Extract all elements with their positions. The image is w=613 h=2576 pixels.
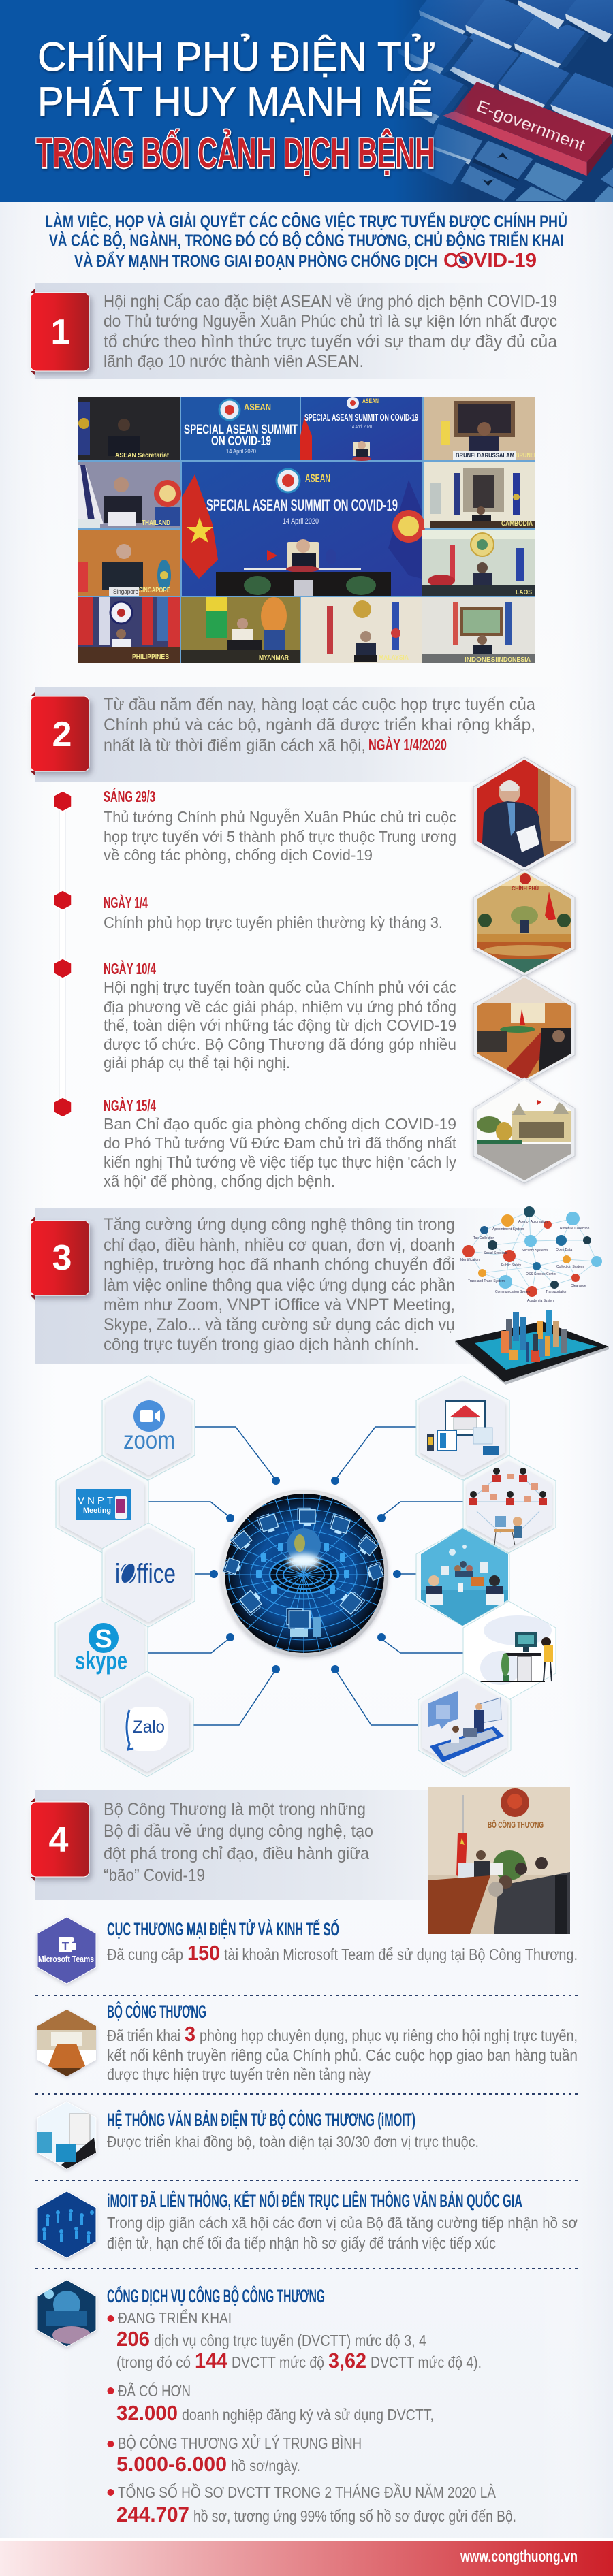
icon: meeting room hexagon [37,2010,96,2076]
photo: national online conference [473,975,576,1082]
item: iMOIT electronic document system: Được triển khai đồng bộ, toàn diện tại 30/30 đơn vị trực thuộc. [107,2133,479,2151]
tile: main summit view: SPECIAL ASEAN SUMMIT ON COVID-19 [206,496,398,515]
section 4 text: đột phá trong chỉ đạo, điều hành giữa [104,1844,369,1863]
hexagon tile: remote classroom on phone [418,1673,511,1777]
stat: daily records: BỘ CÔNG THƯƠNG XỬ LÝ TRUNG BÌNH [118,2433,362,2452]
icon: Microsoft Teams hexagon: Microsoft Teams [38,1954,94,1964]
section 3 text: làm việc online thông qua việc ứng dụng các phần [104,1276,455,1295]
section 1 text: tổ chức theo hình thức trực tuyến với sự tham dự đầy đủ của [104,332,557,351]
number badge 3: 3 [52,1238,72,1278]
hexagon tile: working from home [463,1601,556,1700]
section 4 text: Bộ đi đầu về ứng dụng công nghệ, tạo [104,1822,373,1841]
tile: ASEAN Secretariat [78,397,180,460]
tile: summit slide: ASEAN [244,402,271,413]
stat: services deployed: 144 [195,2349,228,2372]
title: CHÍNH PHỦ ĐIỆN TỬ [37,34,436,80]
section 1 text [104,292,557,371]
item: Ministry of Industry and Trade: được thực hiện trực tuyến trên nền tảng này [107,2065,371,2083]
stat: daily records: hồ sơ/ngày. [231,2457,300,2475]
illustration: e-government network diagram: Transportation [546,1290,567,1294]
illustration: e-government network diagram: Open Data [556,1248,572,1252]
illustration: e-government network diagram: Communication System [495,1290,531,1294]
subtitle: COVID-19 [443,250,537,272]
section 2 text: Chính phủ và các bộ, ngành đã được triển khai rộng khắp, [104,715,535,735]
tile: summit slide [181,397,300,460]
stat: daily records: 5.000-6.000 [116,2452,227,2476]
illustration: e-government network diagram: Identification [460,1258,480,1262]
hub: global network globe [208,1490,399,1657]
event: 10/4: được tổ chức. Bộ Công Thương đã đóng góp nhiều [104,1035,456,1053]
icon: digital tech hexagon [37,2280,96,2347]
photo: Ministry of Industry and Trade meeting: BỘ CÔNG THƯƠNG [488,1820,544,1830]
tile: Philippines: PHILIPPINES [132,654,169,661]
item: public service portal [37,2280,516,2526]
illustration: e-government network diagram: Academia System [527,1299,554,1303]
stat: registered businesses: ĐÃ CÓ HƠN [118,2382,191,2400]
illustration: e-government network diagram: Revenue Collection [560,1227,590,1231]
hexagon tile: Skype [55,1597,148,1703]
logo: iOffice: iOffice [115,1559,176,1589]
illustration: e-government network diagram: Social Services [484,1251,507,1255]
item: E-commerce department: 150 [187,1941,220,1965]
small monitors around hub [223,1508,385,1637]
event: 10/4: địa phương về các giải pháp, nhiệm vụ ứng phó tổng [104,998,456,1016]
logo: Zoom: zoom [123,1426,175,1454]
connector dots [210,1477,401,1673]
tile: main summit view: ASEAN [305,472,330,485]
number badge 4 [31,1797,89,1882]
section 2 text: Từ đầu năm đến nay, hàng loạt các cuộc họp trực tuyến của [104,695,535,714]
item: Ministry of Industry and Trade: BỘ CÔNG THƯƠNG [107,2001,206,2022]
photo: prime minister speaking [473,757,576,871]
event: 29/3: SÁNG 29/3 [104,787,155,805]
event: 29/3 [104,787,456,864]
illustration: e-government network diagram: Track and Trace System [468,1279,505,1283]
event: 1/4: NGÀY 1/4 [104,893,148,912]
logo: VNPT Meeting: Meeting [83,1507,111,1515]
hexagon tile: VNPT Meeting [56,1455,148,1553]
tile: summit slide: 14 April 2020 [226,448,256,455]
timeline marker 2 [54,890,72,910]
tile: Singapore: SINGAPORE [139,587,170,594]
logo: Zalo: Zalo [133,1718,165,1737]
title [36,34,436,177]
stat: services deployed: DVCTT mức độ [232,2353,324,2371]
event: 15/4: kiến nghị Thủ tướng về việc tiếp tục thực hiện 'cách ly [104,1153,456,1171]
illustration: e-government network diagram: Tax Collection [473,1236,494,1240]
illustration: e-government network diagram: Appointment System [492,1227,524,1231]
section 1 text: do Thủ tướng Nguyễn Xuân Phúc chủ trì là sự kiện lớn nhất được [104,311,557,331]
keyboard image with E-government key [381,0,613,202]
event: 10/4: NGÀY 10/4 [104,959,156,978]
panel: section 1 [31,283,573,379]
item: iMOIT electronic document system [37,2102,479,2169]
illustration: e-government network diagram: Collection System [556,1265,584,1269]
number badge 1: 1 [51,312,70,352]
number badge 4: 4 [49,1820,69,1860]
event: 15/4: xã hội' để phòng, chống dịch bệnh. [104,1172,335,1190]
section 2 text: NGÀY 1/4/2020 [368,735,447,754]
number badge 3 [31,1216,89,1300]
hexagon tile: iOffice [102,1523,195,1627]
event: 29/3: Thủ tướng Chính phủ Nguyễn Xuân Phúc chủ trì cuộc [104,808,456,826]
event: 15/4: NGÀY 15/4 [104,1096,156,1114]
timeline marker 1 [54,791,72,811]
item: iMOIT national interconnection [37,2189,578,2258]
tile: summit host: ASEAN [362,398,379,404]
event: 1/4 [104,893,443,931]
tile: Indonesia: INDONESIA [497,656,531,664]
event: 15/4: do Phó Thủ tướng Vũ Đức Đam chủ trì đã thống nhất [104,1134,457,1152]
panel: section 2 [31,687,573,782]
stat: services deployed: ĐANG TRIỂN KHAI [118,2308,232,2327]
event: 15/4 [104,1096,457,1190]
event: 29/3: về công tác phòng, chống dịch Covid-19 [104,846,373,864]
hexagon tile: government portal devices [416,1376,509,1480]
tile: main summit view [182,462,425,596]
tile: Laos: LAOS [516,589,532,596]
illustration: e-government network diagram: Security Systems [522,1249,548,1253]
panel: section 4 [31,1790,573,1900]
logo: VNPT Meeting: VNPT [78,1495,113,1507]
section 4 text: “bão” Covid-19 [104,1866,205,1885]
icon: Microsoft Teams hexagon [37,1917,96,1984]
number badge 1 [31,288,89,376]
tile: Indonesia [422,597,535,664]
photo: Hanoi opera house [473,1078,576,1183]
item: Ministry of Industry and Trade: Đã triển khai [107,2027,180,2044]
stat: total records: 244.707 [116,2502,189,2526]
stat: services deployed: dịch vụ công trực tuyến (DVCTT) mức độ 3, 4 [154,2332,426,2349]
stat: total records: TỔNG SỐ HỒ SƠ DVCTT TRONG 2 THÁNG ĐẦU NĂM 2020 LÀ [118,2483,497,2501]
stat: registered businesses [108,2382,434,2425]
logo: Skype: skype [75,1647,127,1675]
tile: Brunei: BRUNEI [516,452,535,460]
photo: government meeting: CHÍNH PHỦ [512,886,539,892]
icon: virus crossed out [456,253,471,268]
item: iMOIT electronic document system: HỆ THỐNG VĂN BẢN ĐIỆN TỬ BỘ CÔNG THƯƠNG (iMOIT) [107,2108,415,2130]
hexagon photo column [473,757,576,1183]
stat: registered businesses: 32.000 [116,2401,178,2425]
section 4 text: Bộ Công Thương là một trong những [104,1800,366,1819]
tile: Philippines [78,597,180,663]
icon: Microsoft Teams hexagon: T [62,1939,69,1952]
section 1 text: Hội nghị Cấp cao đặc biệt ASEAN về ứng phó dịch bệnh COVID-19 [104,292,557,311]
number badge 2 [31,692,89,776]
tile: Myanmar: MYANMAR [259,654,289,662]
tile: Thailand: THAILAND [142,519,170,527]
event: 10/4: thể, toàn diện với những tác động từ dịch COVID-19 [104,1016,456,1034]
logo: Skype: S [95,1625,112,1654]
photo collage: ASEAN summit [78,397,535,664]
item: E-commerce department: CỤC THƯƠNG MẠI ĐIỆN TỬ VÀ KINH TẾ SỐ [107,1918,339,1939]
stat: total records: hồ sơ, tương ứng 99% tổng số hồ sơ được gửi đến Bộ. [193,2507,516,2525]
stat: services deployed [108,2308,482,2372]
subtitle [45,211,567,272]
tile: ASEAN Secretariat: ASEAN Secretariat [115,452,170,460]
tile: Thailand [78,462,181,528]
key label: E-government [474,97,588,155]
tile: summit slide: SPECIAL ASEAN SUMMIT [184,423,298,437]
section 3 text: chỉ đạo, điều hành, nhiều cơ quan, đơn vị, doanh [104,1236,455,1255]
hexagon tile: networked team [463,1455,556,1553]
section 4 text [104,1800,373,1885]
icon: folders hexagon [37,2102,96,2169]
logo: VNPT Meeting [76,1489,131,1520]
tile: summit host [300,397,422,461]
tile: summit slide: ON COVID-19 [211,434,271,449]
event: 29/3: họp trực tuyến với 5 thành phố trực thuộc Trung ương [104,828,456,846]
timeline [54,787,457,1190]
connector lines [146,1427,466,1725]
section 3 text: công trực tuyến trong giao dịch hành chính. [104,1335,419,1354]
number badge 2: 2 [52,715,72,754]
timeline marker 4 [54,1097,72,1117]
item: E-commerce department [37,1917,578,1984]
tile: summit host: 14 April 2020 [350,425,372,430]
illustration: e-government network diagram: Clearance [571,1284,586,1288]
item: Ministry of Industry and Trade: 3 [185,2022,195,2046]
tile: Brunei [424,397,535,460]
tile: Cambodia [424,462,535,528]
logo: Zoom [123,1400,175,1454]
illustration: e-government network diagram: OSS Service Center [526,1272,556,1276]
item: Ministry of Industry and Trade [37,2001,578,2083]
event: 10/4: giải pháp cụ thể tại hội nghị. [104,1054,290,1072]
stat: services deployed: (trong đó có [116,2353,191,2371]
stat: services deployed: DVCTT mức độ 4). [371,2353,482,2371]
tile: Cambodia: CAMBODIA [501,520,533,528]
stat: total records [108,2483,516,2526]
hexagon tile: Zalo [101,1671,193,1777]
photo: government meeting [473,869,576,976]
logo: Zalo [125,1707,168,1751]
section 3 text: mềm như Zoom, VNPT iOffice và VNPT Meeting, [104,1295,455,1315]
tile: summit host: SPECIAL ASEAN SUMMIT ON COVID-19 [304,412,418,423]
section 2 text: nhất là từ thời điểm giãn cách xã hội, [104,736,366,755]
subtitle: VÀ ĐẨY MẠNH TRONG GIAI ĐOẠN PHÒNG CHỐNG DỊCH [74,251,437,271]
section 3 text: Skype, Zalo... và tăng cường sử dụng các dịch vụ [104,1315,455,1334]
tile: Laos [422,530,535,596]
title: PHÁT HUY MẠNH MẼ [37,79,433,125]
timeline marker 3 [54,959,72,978]
event: 15/4: Ban Chỉ đạo quốc gia phòng chống dịch COVID-19 [104,1115,456,1133]
illustration: smart city on tablet [455,1310,609,1385]
section 3 text [104,1215,455,1354]
illustration: e-government network diagram: Public Safety [501,1263,522,1268]
item: E-commerce department: Đã cung cấp [107,1946,183,1963]
illustration: e-government network diagram [460,1206,602,1303]
tile: Brunei: BRUNEI DARUSSALAM [456,452,514,459]
photo: Ministry of Industry and Trade meeting [428,1787,570,1934]
section 1 text: lãnh đạo 10 nước thành viên ASEAN. [104,352,364,371]
tile: Malaysia: MALAYSIA [379,654,409,662]
tile: Singapore [78,530,180,596]
stat: services deployed: 206 [116,2327,150,2351]
tile: Myanmar [181,597,300,663]
section 3 text: nghiệp, trường học đã nhanh chóng chuyển đổi [104,1255,455,1274]
tile: Singapore: Singapore [113,588,138,595]
stat: registered businesses: doanh nghiệp đăng ký và sử dụng DVCTT, [182,2406,434,2424]
event: 1/4: Chính phủ họp trực tuyến phiên thường kỳ tháng 3. [104,914,443,931]
tile: Indonesia: INDONESI [465,656,497,664]
illustration: e-government network diagram: Agency Automation [518,1220,548,1224]
stat: services deployed: 3,62 [328,2349,366,2372]
item: public service portal: CỔNG DỊCH VỤ CÔNG BỘ CÔNG THƯƠNG [107,2285,325,2306]
hero banner [0,0,613,202]
event: 10/4 [104,959,456,1072]
tile: main summit view: 14 April 2020 [283,517,319,526]
tile: Malaysia [301,597,422,663]
section 2 text [104,695,535,755]
diagram: connected apps hub [146,1427,466,1725]
hexagon tile: online collaboration [416,1528,509,1626]
item: Ministry of Industry and Trade: kết nối kênh truyền riêng của Chính phủ. Các cuộc họp giao ban hàng tuần [107,2046,578,2064]
panel: section 3 [31,1208,573,1364]
hexagon tile: Zoom [102,1376,195,1480]
stat: daily records [108,2433,362,2476]
item: iMOIT national interconnection: điện tử, hạn chế tối đa tiếp nhận hồ sơ giấy để tránh việc tiếp xúc [107,2234,496,2252]
icon: people network hexagon [37,2191,96,2258]
event: 10/4: Hội nghị trực tuyến toàn quốc của Chính phủ với các [104,978,456,996]
section 3 text: Tăng cường ứng dụng công nghệ thông tin trong [104,1215,455,1234]
logo: Skype [75,1623,127,1675]
footer [0,2538,613,2576]
